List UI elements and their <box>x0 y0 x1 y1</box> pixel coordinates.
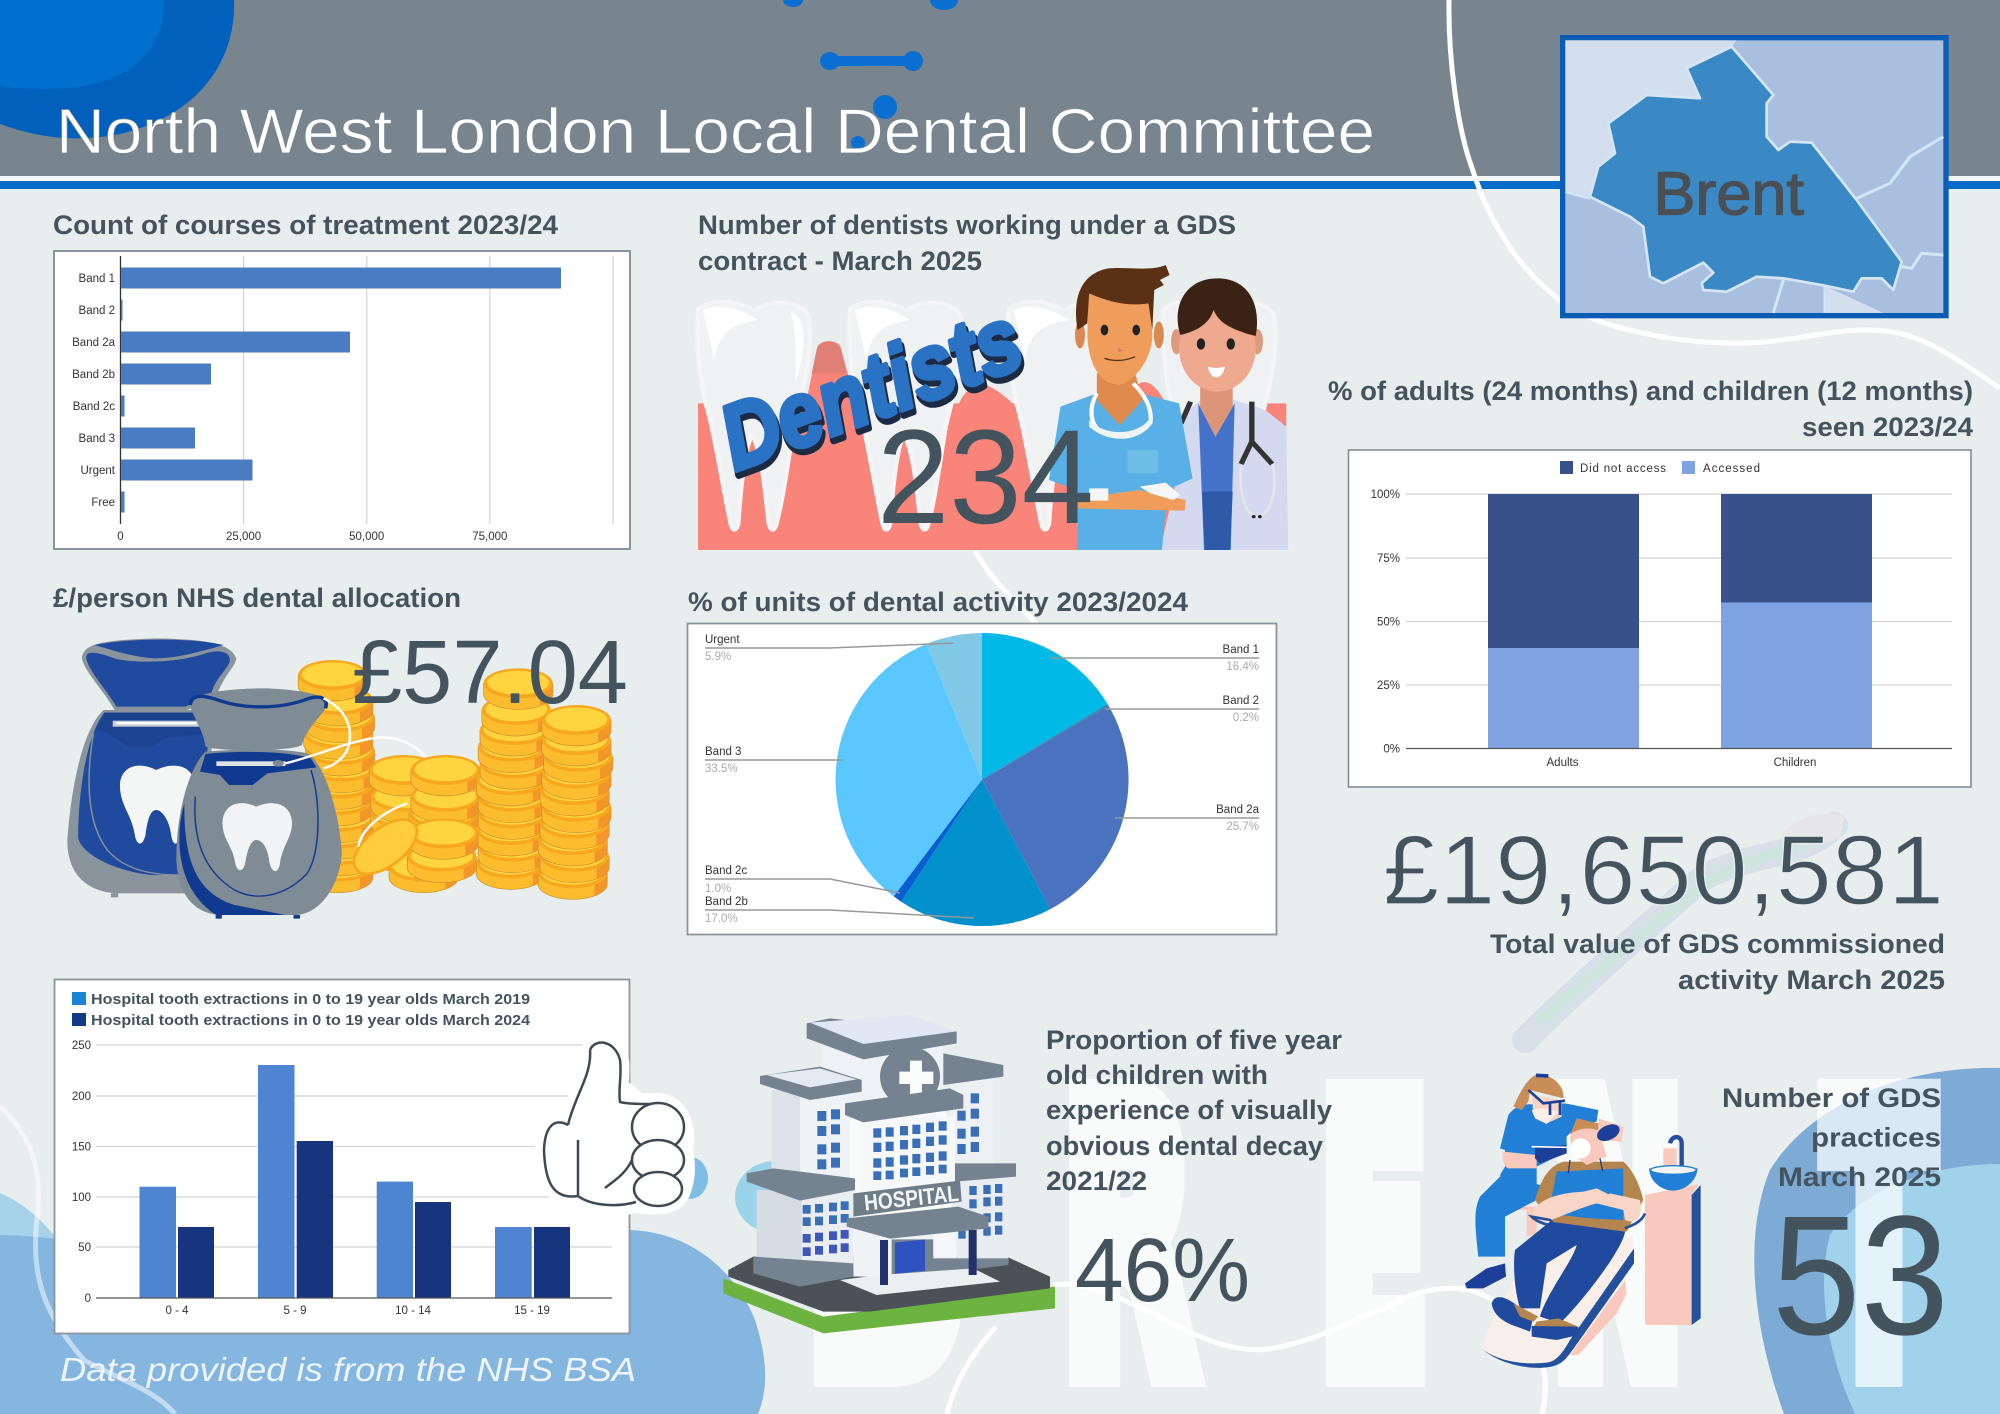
bottom right blue blobs <box>1754 1068 2000 1414</box>
allocation value: £57.04 <box>352 623 628 723</box>
pie labels: 1.0% <box>705 883 731 895</box>
panel: hospital extractions chart: 10 - 14 <box>395 1305 432 1317</box>
legend: Accessed <box>1703 463 1760 475</box>
caption: total commissioned activity: Total value of GDS commissioned <box>1490 929 1945 959</box>
pie labels: Band 1 <box>1223 644 1259 656</box>
small blue blobs behind thumb and hospital <box>672 1157 815 1233</box>
source note: Data provided is from the NHS BSA <box>60 1351 636 1388</box>
panel: hospital extractions chart: 0 <box>85 1293 91 1305</box>
panel: access stacked bar chart <box>1348 450 1971 787</box>
panel: courses of treatment bar chart: 0 <box>117 531 124 543</box>
heading: number of dentists: contract - March 2025 <box>698 246 982 276</box>
panel: hospital extractions chart: 100 <box>72 1192 91 1204</box>
panel: pie chart units of dental activity <box>688 624 1276 934</box>
map: Brent <box>1563 38 1946 316</box>
illustration: Dentists script lettering: Dentists <box>707 287 1035 490</box>
heading: units of dental activity: % of units of dental activity 2023/2024 <box>688 587 1188 617</box>
watermark BRENT <box>806 1025 1934 1414</box>
GDS practices label: March 2025 <box>1778 1162 1941 1192</box>
heading: allocation per person: £/person NHS dental allocation <box>53 583 461 613</box>
illustration: male dentist <box>1049 265 1193 550</box>
pie labels: Band 2b <box>705 896 748 908</box>
patient <box>1492 1118 1645 1340</box>
windows <box>803 1093 1002 1256</box>
heading: adults and children seen: seen 2023/24 <box>1802 412 1973 442</box>
panel: courses of treatment bar chart: Band 2a <box>72 337 116 349</box>
pie labels: Band 2a <box>1216 804 1260 816</box>
dentist <box>1465 1074 1598 1288</box>
GDS practices value: 53 <box>1772 1181 1949 1371</box>
pie labels: 0.2% <box>1233 712 1259 724</box>
pie labels: 16.4% <box>1226 661 1259 673</box>
panel: access stacked bar chart: Adults <box>1547 757 1579 769</box>
legend <box>1560 461 1760 475</box>
heading: number of dentists <box>698 210 1236 276</box>
panel: hospital extractions chart: 250 <box>72 1040 91 1052</box>
heading: number of dentists: Number of dentists working under a GDS <box>698 210 1236 240</box>
heading: adults and children seen: % of adults (24 months) and children (12 months) <box>1328 376 1973 406</box>
dental chair <box>1483 1207 1634 1368</box>
legend: Hospital tooth extractions in 0 to 19 year olds March 2019 <box>91 992 530 1008</box>
map: Brent: Brent <box>1653 159 1804 228</box>
caption: total commissioned activity <box>1490 929 1945 995</box>
number of dentists value: 234 <box>877 403 1094 552</box>
panel: hospital extractions chart: 200 <box>72 1091 91 1103</box>
GDS practices label <box>1722 1083 1941 1192</box>
panel: hospital extractions chart: 150 <box>72 1142 91 1154</box>
legend: Hospital tooth extractions in 0 to 19 year olds March 2024 <box>91 1013 530 1029</box>
GDS practices label: Number of GDS <box>1722 1083 1941 1113</box>
panel: courses of treatment bar chart: 25,000 <box>226 531 261 543</box>
pie labels: 17.0% <box>705 913 738 925</box>
decay proportion label: Proportion of five year <box>1046 1025 1342 1055</box>
legend: Did not access <box>1580 463 1666 475</box>
hospital sign: HOSPITAL <box>863 1180 960 1216</box>
cabinet and basin <box>1645 1137 1701 1325</box>
panel: courses of treatment bar chart: Band 2c <box>73 401 115 413</box>
pie labels: 5.9% <box>705 651 731 663</box>
illustration: dentist treating patient <box>1465 1074 1701 1368</box>
panel: access stacked bar chart: 75% <box>1377 553 1400 565</box>
panel: hospital extractions chart <box>54 980 630 1334</box>
pie leader lines <box>705 643 1259 918</box>
illustration: floss dispenser front <box>176 688 342 919</box>
panel: access stacked bar chart: 0% <box>1383 744 1400 756</box>
panel: courses of treatment bar chart: Band 2 <box>79 305 115 317</box>
decay proportion label <box>1046 1025 1342 1196</box>
entrance <box>840 1207 1000 1295</box>
pie labels: Band 2c <box>705 865 747 877</box>
pie labels: 25.7% <box>1226 821 1259 833</box>
faded toothbrush <box>1525 814 1845 1040</box>
panel: courses of treatment bar chart: Band 2b <box>72 369 115 381</box>
panel: hospital extractions chart: 50 <box>78 1242 91 1254</box>
illustration: floss strands <box>285 698 425 847</box>
decay proportion value: 46% <box>1075 1221 1250 1321</box>
illustration: floss dispenser back <box>67 638 236 897</box>
header band <box>0 0 2000 189</box>
legend <box>72 992 530 1029</box>
panel: access stacked bar chart: 100% <box>1371 489 1400 501</box>
decay proportion label: 2021/22 <box>1046 1166 1147 1196</box>
icon: thumbs up <box>544 1043 686 1207</box>
header blue blob <box>0 0 234 138</box>
pie slices <box>836 633 1129 926</box>
panel: courses of treatment bar chart: Band 3 <box>79 433 115 445</box>
panel: courses of treatment bar chart: Free <box>91 497 115 509</box>
illustration: teeth and gums <box>697 302 1286 550</box>
panel: access stacked bar chart: 50% <box>1377 616 1400 628</box>
decay proportion label: experience of visually <box>1046 1095 1332 1125</box>
panel: courses of treatment bar chart: Urgent <box>80 465 116 477</box>
panel: access stacked bar chart: Children <box>1774 757 1816 769</box>
stacked bars <box>1488 494 1872 748</box>
header decorative bone and dots <box>783 0 958 150</box>
heading: adults and children seen <box>1328 376 1973 442</box>
illustration: Dentists script lettering: Dentists <box>709 292 1037 495</box>
panel: courses of treatment bar chart: 75,000 <box>472 531 507 543</box>
caption: total commissioned activity: activity March 2025 <box>1678 965 1945 995</box>
title: North West London Local Dental Committee <box>56 97 1375 167</box>
decay proportion label: obvious dental decay <box>1046 1131 1323 1161</box>
base <box>723 1257 1055 1333</box>
panel: courses of treatment bar chart: 50,000 <box>349 531 384 543</box>
illustration: female dentist <box>1160 278 1288 550</box>
roofs and slabs <box>747 1018 1016 1201</box>
medallion with cross <box>880 1047 940 1107</box>
bottom left blue blobs <box>0 1193 765 1414</box>
pie labels: 33.5% <box>705 763 738 775</box>
pie labels: Band 3 <box>705 746 741 758</box>
panel: hospital extractions chart: 5 - 9 <box>283 1305 307 1317</box>
pie labels: Urgent <box>705 634 740 646</box>
panel: courses of treatment bar chart: Band 1 <box>79 273 115 285</box>
panel: access stacked bar chart: 25% <box>1377 680 1400 692</box>
illustration: gold coin stacks <box>298 660 613 899</box>
bars <box>140 1065 570 1298</box>
pie labels: Band 2 <box>1223 695 1259 707</box>
decay proportion label: old children with <box>1046 1060 1268 1090</box>
panel: hospital extractions chart: 0 - 4 <box>165 1305 189 1317</box>
panel: hospital extractions chart: 15 - 19 <box>514 1305 550 1317</box>
panel: courses of treatment bar chart <box>54 251 630 549</box>
heading: courses of treatment: Count of courses of treatment 2023/24 <box>53 210 558 240</box>
GDS practices label: practices <box>1811 1122 1941 1152</box>
illustration: hospital building <box>723 1015 1055 1333</box>
pie labels <box>705 634 1260 925</box>
wings <box>753 1043 1008 1287</box>
total commissioned value: £19,650,581 <box>1383 815 1944 925</box>
